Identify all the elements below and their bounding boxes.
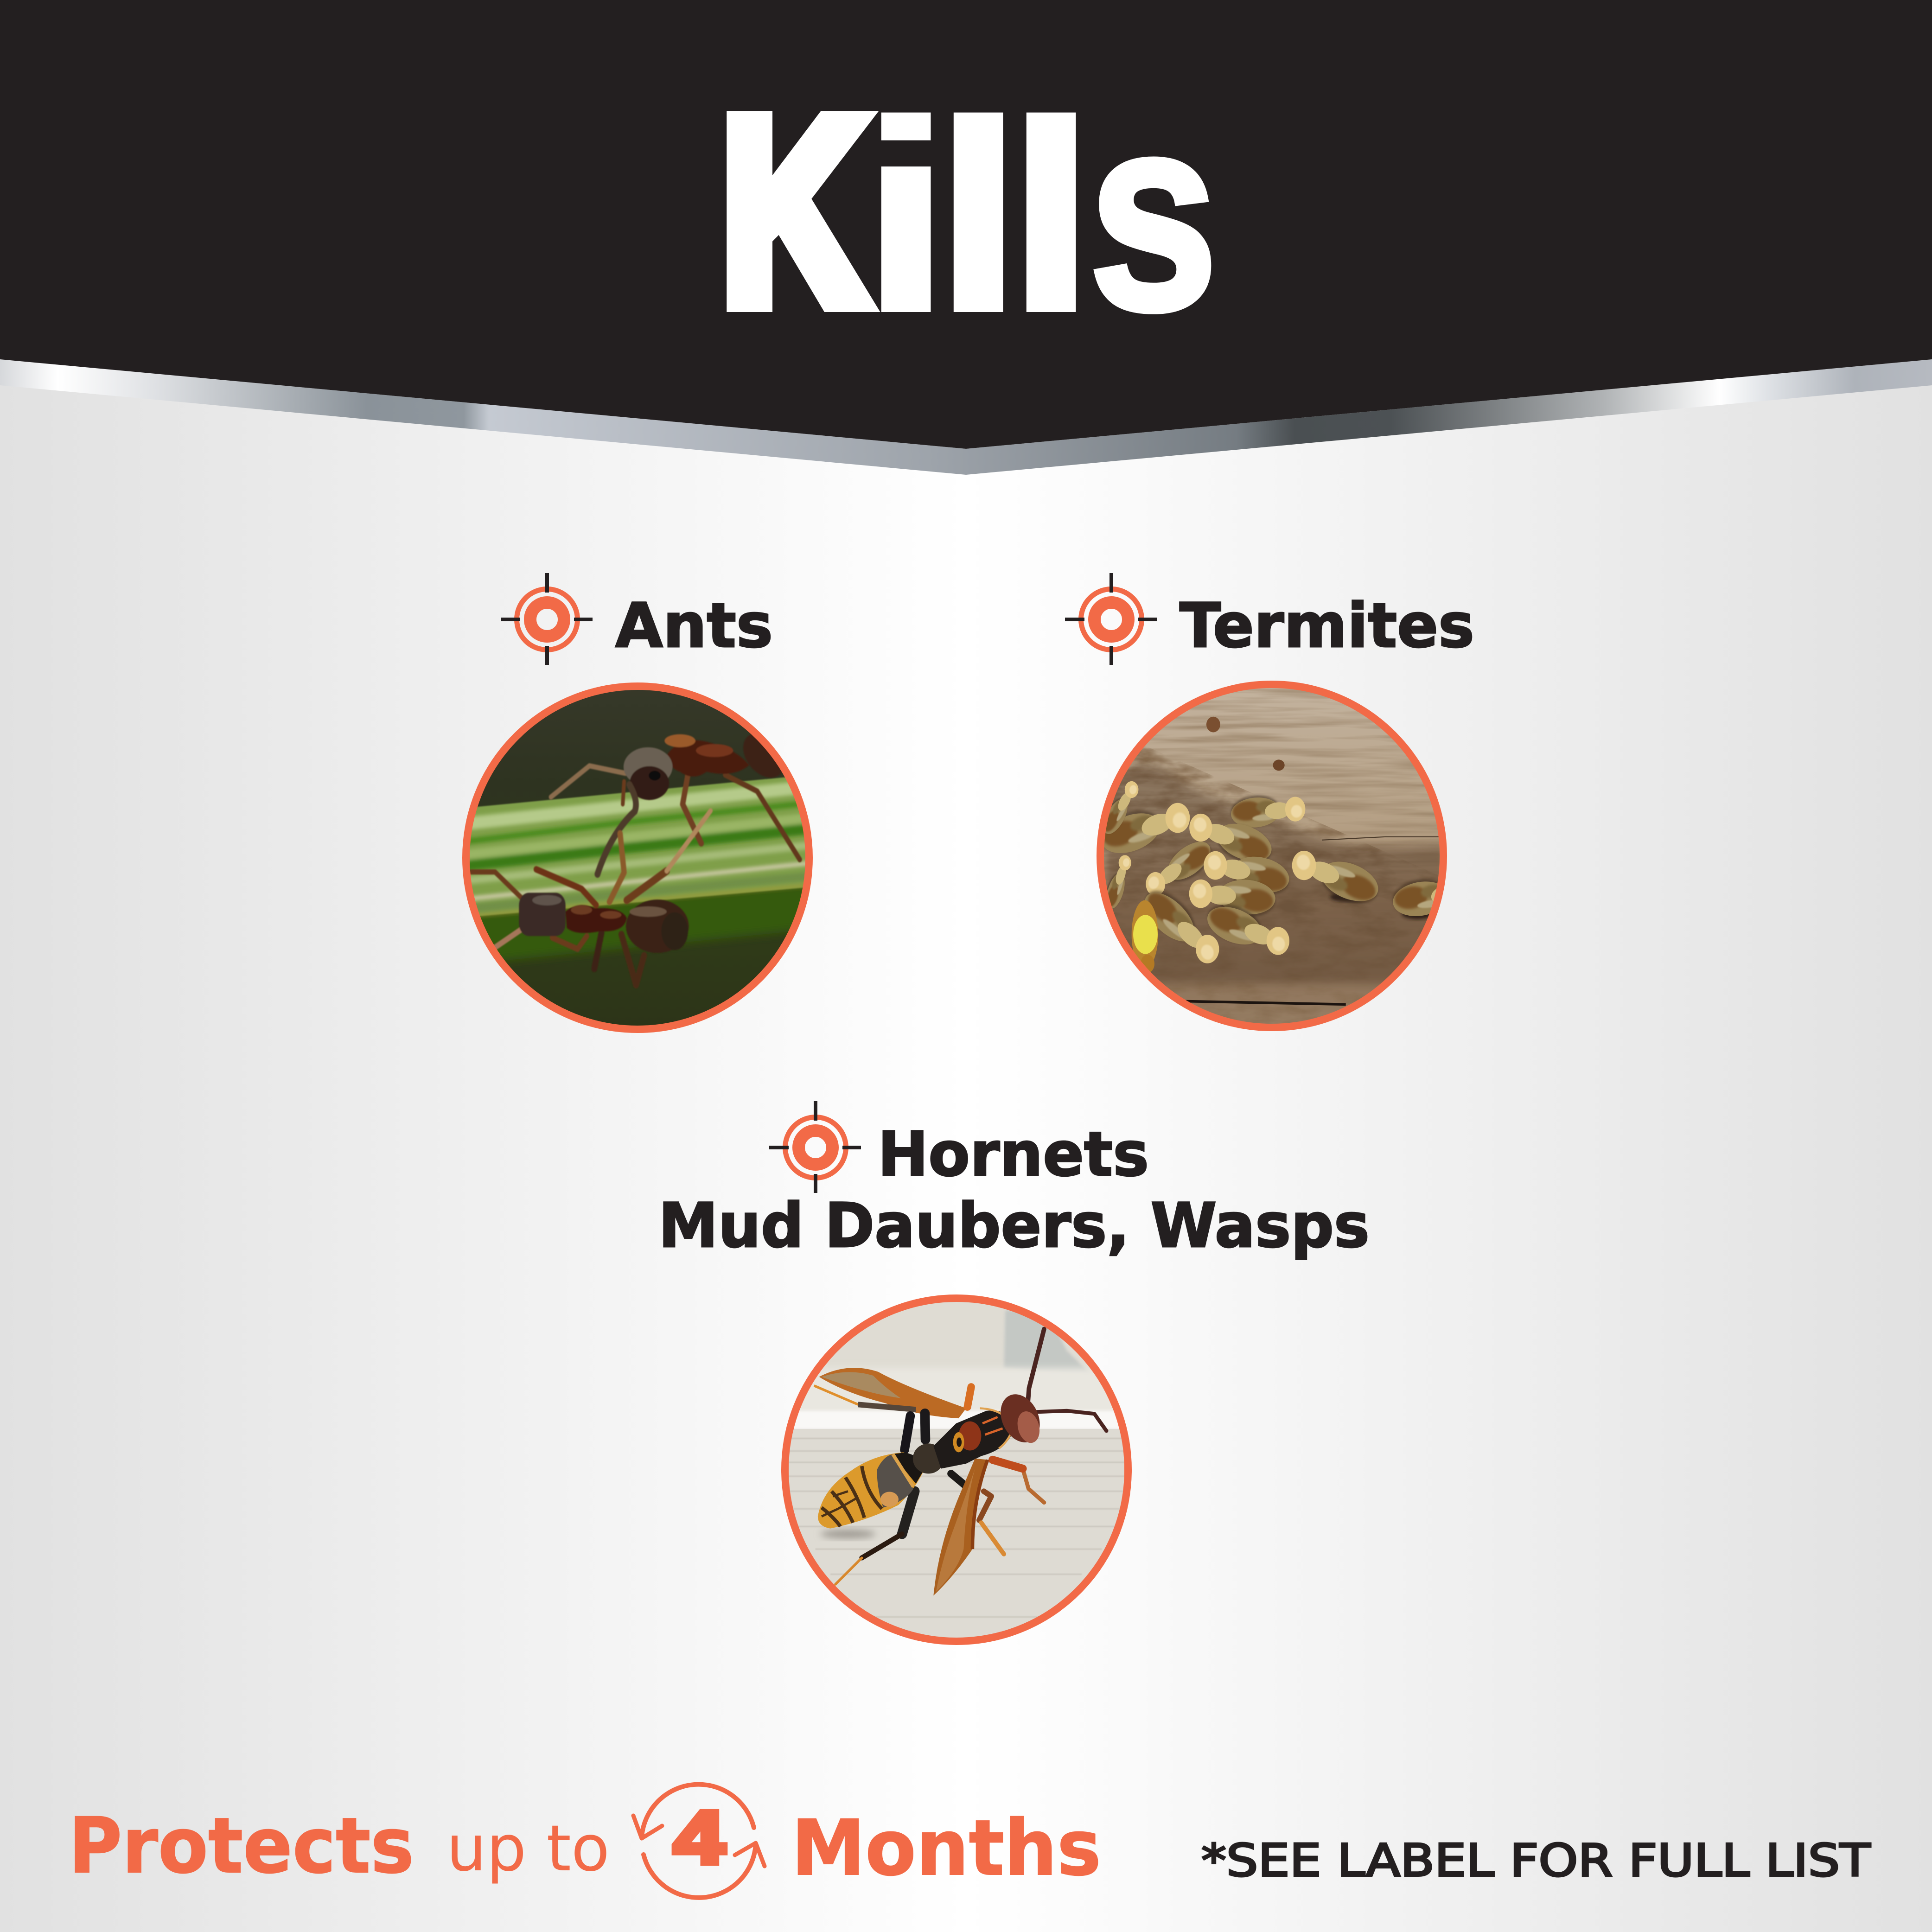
heading: hornets: Hornets	[878, 1119, 1149, 1190]
section: termites	[1065, 573, 1479, 1039]
header band	[0, 0, 1932, 475]
photo: termites on wood	[1104, 688, 1440, 1024]
title: s	[1089, 59, 1218, 367]
photo ring: hornets	[785, 1298, 1128, 1641]
photo ring: ants	[466, 686, 809, 1029]
silver chevron stripe	[0, 359, 1932, 475]
months text: Months	[791, 1804, 1101, 1893]
protects text: Protects	[69, 1801, 414, 1890]
see label note: *SEE LABEL FOR FULL LIST	[1201, 1835, 1870, 1887]
up to text: up to	[446, 1812, 610, 1886]
heading: ants: Ants	[615, 590, 773, 662]
icon: target ants	[501, 573, 593, 665]
number 4: 4	[674, 1796, 725, 1879]
photo ring: termites	[1100, 684, 1443, 1027]
title: l	[928, 63, 1028, 370]
heading: mud daubers, wasps: Mud Daubers, Wasps	[658, 1190, 1370, 1262]
section: hornets	[658, 1101, 1370, 1655]
icon: target termites	[1065, 573, 1157, 665]
section: ants	[456, 573, 826, 1039]
title: l	[1001, 63, 1102, 370]
black header shape	[0, 0, 1932, 449]
icon: 4 month cycle arrows	[633, 1785, 765, 1898]
title: i	[856, 63, 956, 370]
footer	[69, 1785, 1870, 1898]
photo: hornet on white wood	[789, 1302, 1124, 1638]
title: K	[722, 67, 864, 356]
photo: ants on a green stem	[470, 690, 805, 1026]
heading: termites: Termites	[1180, 590, 1474, 662]
icon: target hornets	[769, 1101, 861, 1193]
